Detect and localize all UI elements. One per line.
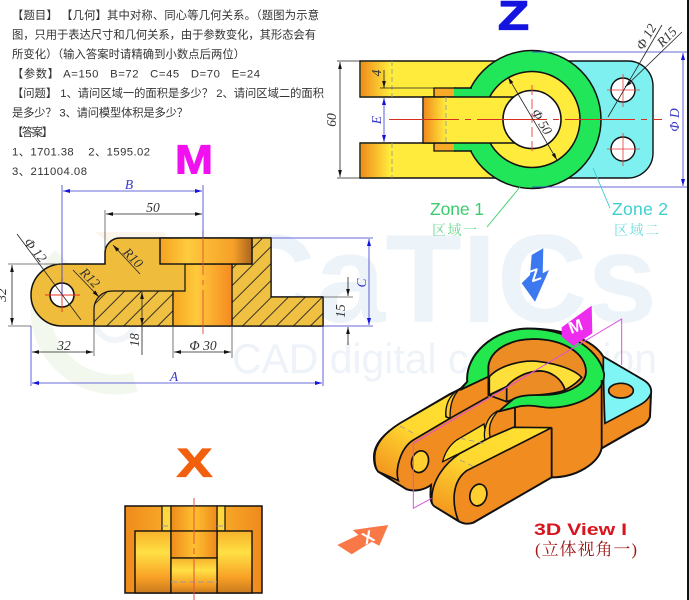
bore bbox=[173, 264, 232, 326]
zone 1 label bbox=[430, 187, 520, 239]
hatched right bbox=[232, 238, 323, 326]
section view M drawing: A bbox=[169, 369, 179, 384]
plate: zone 2 bbox=[532, 61, 653, 178]
zone 2 label bbox=[593, 168, 668, 239]
top view Z drawing: E bbox=[369, 115, 384, 125]
arrow: X direction: X bbox=[359, 526, 378, 548]
watermark: CaTICs logo: CAD digital competition bbox=[232, 335, 657, 382]
section view M drawing bbox=[0, 177, 373, 386]
watermark: CaTICs logo: CaTICs bbox=[225, 210, 657, 349]
upper arm bbox=[360, 61, 500, 97]
left arm top bbox=[375, 389, 460, 481]
lower bore bbox=[507, 371, 565, 402]
text block: question: 【问题】 1、请问区域一的面积是多少？ 2、请问区域二的面积 bbox=[12, 86, 324, 100]
green necks bbox=[454, 88, 492, 151]
section view M drawing: 50 bbox=[146, 200, 160, 215]
label: 3D view Chinese: (立体视角一) bbox=[535, 540, 637, 559]
text block: question: 所变化）（输入答案时请精确到小数点后两位） bbox=[12, 47, 245, 61]
arrow: X direction bbox=[337, 525, 388, 554]
top view Z drawing: Φ 12 bbox=[633, 21, 660, 52]
section plane M bbox=[413, 319, 622, 508]
bore bbox=[488, 339, 586, 402]
view label: M: M bbox=[175, 136, 213, 182]
top ring: zone 1 bbox=[460, 329, 604, 412]
middle yellow block bbox=[443, 424, 487, 462]
top view Z drawing: 60 bbox=[324, 113, 339, 127]
text block: question: 是多少？ 3、请问模型体积是多少？ bbox=[12, 106, 188, 120]
section view M drawing: C bbox=[354, 278, 369, 288]
dimensions side view bbox=[8, 210, 353, 358]
fork holes bbox=[409, 449, 431, 474]
text block: question: 3、211004.08 bbox=[12, 166, 87, 178]
fork edge bbox=[450, 397, 488, 418]
text block: question: 图，只用于表达尺寸和几何关系，由于参数变化，其形态会有 bbox=[12, 28, 316, 42]
counterbore bbox=[160, 238, 252, 264]
section view M drawing: R10 bbox=[119, 244, 146, 271]
pin hole bbox=[50, 283, 74, 307]
3D isometric view bbox=[374, 306, 651, 524]
hatched left bbox=[94, 291, 173, 326]
plate top: zone 2 bbox=[603, 357, 651, 423]
M tag bbox=[562, 306, 592, 346]
text block: question: 1、1701.38 2、1595.02 bbox=[12, 146, 150, 158]
zone 1 label: 区域一 bbox=[432, 223, 477, 239]
arrow: Z direction bbox=[522, 248, 549, 302]
3D isometric view: M bbox=[566, 315, 585, 338]
section view M drawing: 15 bbox=[333, 304, 348, 318]
lower slit tab bbox=[484, 411, 498, 440]
plate hole bbox=[609, 383, 633, 398]
lower arm bbox=[360, 143, 500, 178]
top view Z drawing: Φ 50 bbox=[528, 106, 555, 137]
section view M drawing: B bbox=[125, 177, 133, 192]
text block: question: 【参数】 A=150 B=72 C=45 D=70 E=24 bbox=[12, 66, 260, 80]
dimensions top view bbox=[337, 61, 434, 178]
top view Z drawing bbox=[324, 21, 687, 189]
section view M drawing: Φ 12 bbox=[21, 235, 50, 266]
arrow: Z direction: Z bbox=[527, 265, 543, 286]
text block: question bbox=[12, 8, 324, 178]
barrel edges bbox=[489, 380, 602, 477]
top view Z drawing: 4 bbox=[369, 69, 384, 76]
middle tongue bbox=[423, 97, 515, 143]
section view M drawing: Φ 30 bbox=[189, 338, 217, 353]
text block: question: 【题目】 【几何】其中对称、同心等几何关系。（题图为示意 bbox=[12, 8, 319, 22]
ledge bbox=[489, 361, 582, 395]
mounting holes bbox=[611, 78, 635, 102]
section view M drawing: R12 bbox=[76, 264, 103, 291]
section view M drawing: 32 bbox=[56, 338, 71, 353]
main silhouette bbox=[374, 329, 651, 524]
top view Z drawing: Φ D bbox=[667, 108, 682, 132]
front view X drawing bbox=[125, 498, 262, 600]
inner circle bbox=[484, 72, 580, 168]
zone 1 label: Zone 1 bbox=[430, 199, 484, 219]
right edge bar bbox=[687, 0, 689, 600]
top view Z drawing: R15 bbox=[653, 24, 680, 51]
watermark: CaTICs logo bbox=[40, 210, 657, 385]
zone 2 label: Zone 2 bbox=[612, 199, 668, 219]
upper slit tab bbox=[446, 389, 460, 418]
text block: question: 【答案】 bbox=[12, 125, 53, 139]
centre hole bbox=[503, 90, 561, 148]
right arm top bbox=[432, 427, 552, 521]
view label: X: X bbox=[177, 442, 212, 486]
zone 2 label: 区域二 bbox=[614, 223, 659, 239]
small tabs bbox=[434, 88, 455, 151]
zone 1 ring bbox=[474, 61, 590, 178]
body profile bbox=[31, 238, 323, 326]
label: 3D View I: 3D View I bbox=[534, 520, 627, 539]
section view M drawing: 18 bbox=[127, 333, 142, 347]
